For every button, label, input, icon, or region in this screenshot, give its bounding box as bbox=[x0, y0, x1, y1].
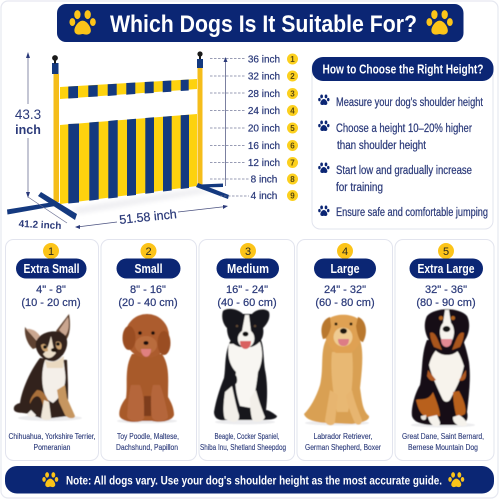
size label bbox=[410, 258, 483, 278]
height range: 16" - 24" bbox=[226, 284, 268, 296]
height labels: 24 inch bbox=[248, 106, 280, 117]
height range: 32" - 36" bbox=[425, 284, 467, 296]
icon: paw left bbox=[42, 472, 58, 487]
size label: Large bbox=[330, 261, 360, 276]
dog: golden retriever bbox=[304, 315, 369, 426]
number badge: 5 bbox=[443, 246, 449, 258]
height range bbox=[217, 284, 277, 309]
width dimension 51.58 inch: 51.58 inch bbox=[119, 207, 177, 227]
breed examples bbox=[116, 431, 179, 452]
height range: 24" - 32" bbox=[324, 284, 366, 296]
breed examples bbox=[402, 431, 484, 452]
number badge: 3 bbox=[245, 246, 251, 258]
number badge bbox=[43, 243, 59, 259]
badge numbers: 8 bbox=[290, 175, 295, 184]
height range: (60 - 80 cm) bbox=[315, 297, 375, 309]
icon: paw right bbox=[426, 10, 453, 35]
right foot bbox=[196, 183, 229, 199]
tip 2: Choose a height 10–20% higher bbox=[336, 123, 472, 135]
size label bbox=[116, 258, 180, 278]
badge numbers: 2 bbox=[290, 72, 295, 81]
dog: chihuahua bbox=[14, 314, 82, 421]
left post bbox=[52, 55, 59, 202]
size label: Small bbox=[134, 261, 162, 276]
number badge: 1 bbox=[48, 246, 54, 258]
height labels: 20 inch bbox=[248, 124, 280, 134]
tip 3 bbox=[318, 162, 472, 194]
height range bbox=[118, 284, 178, 309]
panel: large bbox=[297, 240, 392, 460]
badge numbers: 4 bbox=[290, 106, 295, 116]
number badge: 4 bbox=[342, 246, 348, 258]
height range bbox=[315, 284, 375, 309]
height labels bbox=[248, 54, 280, 202]
height labels: 12 inch bbox=[248, 158, 280, 169]
breed examples: Bernese Mountain Dog bbox=[408, 442, 478, 452]
height dimension 43.3 inch: 43.3 bbox=[15, 107, 41, 122]
badge numbers: 7 bbox=[290, 158, 295, 168]
panel: medium bbox=[199, 240, 294, 460]
height range: (20 - 40 cm) bbox=[118, 297, 178, 309]
shadow under hurdle bbox=[70, 188, 212, 214]
depth dimension 41.2 inch bbox=[18, 197, 67, 232]
size label bbox=[216, 258, 279, 278]
panel heading bbox=[312, 57, 494, 81]
size label: Extra Large bbox=[418, 261, 474, 276]
tip 1 bbox=[318, 94, 484, 109]
badge numbers: 5 bbox=[290, 124, 295, 133]
top striped bar bbox=[60, 79, 197, 99]
adjustable height scale bbox=[210, 54, 298, 202]
height labels: 8 inch bbox=[251, 174, 277, 186]
depth dimension 41.2 inch: 41.2 inch bbox=[18, 219, 62, 232]
height range: (80 - 90 cm) bbox=[416, 297, 476, 309]
height labels: 36 inch bbox=[248, 54, 280, 66]
size label: Extra Small bbox=[24, 261, 80, 276]
breed examples: Dachshund, Papillon bbox=[116, 442, 178, 452]
number badges bbox=[287, 54, 298, 201]
title: Which Dogs Is It Suitable For? bbox=[110, 11, 417, 38]
number badge bbox=[438, 243, 454, 259]
height range: 4" - 8" bbox=[36, 284, 66, 296]
number badge bbox=[337, 243, 353, 259]
breed examples: Labrador Retriever, bbox=[314, 431, 372, 441]
height labels: 16 inch bbox=[248, 141, 280, 152]
note banner bbox=[5, 466, 494, 494]
lower striped panel bbox=[60, 114, 197, 204]
breed examples: Toy Poodle, Maltese, bbox=[117, 431, 179, 441]
dashed leader lines bbox=[210, 58, 249, 196]
panel: how to choose the right height bbox=[312, 57, 494, 229]
breed examples bbox=[8, 431, 96, 452]
size label bbox=[314, 258, 376, 278]
breed examples: German Shepherd, Boxer bbox=[305, 442, 381, 452]
height range bbox=[416, 284, 476, 309]
tip 2 bbox=[318, 120, 472, 152]
number badge bbox=[240, 243, 256, 259]
breed examples: Chihuahua, Yorkshire Terrier, bbox=[8, 431, 96, 441]
size label bbox=[16, 258, 86, 278]
dog: toy poodle bbox=[117, 314, 177, 424]
panel: extra small bbox=[6, 240, 98, 460]
height range bbox=[21, 284, 81, 309]
badge numbers: 3 bbox=[290, 90, 295, 98]
tip 2: than shoulder height bbox=[337, 140, 427, 152]
height range: (10 - 20 cm) bbox=[21, 297, 81, 309]
height dimension 43.3 inch: inch bbox=[15, 123, 41, 137]
tip 3: for training bbox=[336, 182, 383, 194]
badge numbers bbox=[290, 55, 295, 200]
left foot bbox=[7, 192, 77, 220]
number badge bbox=[140, 243, 156, 259]
dog: bernese mountain dog bbox=[411, 309, 475, 428]
panel: extra large bbox=[395, 240, 494, 460]
badge numbers: 9 bbox=[290, 192, 295, 200]
height range: 8" - 16" bbox=[130, 284, 166, 296]
title banner bbox=[57, 4, 464, 42]
number badge: 2 bbox=[145, 246, 152, 258]
size label: Medium bbox=[227, 261, 269, 276]
icon: paw left bbox=[69, 10, 96, 35]
breed examples: Pomeranian bbox=[34, 442, 71, 452]
width dimension 51.58 inch bbox=[75, 205, 228, 229]
breed examples bbox=[200, 431, 286, 452]
height labels: 4 inch bbox=[251, 191, 277, 202]
vertical arrow bbox=[224, 57, 228, 186]
breed examples bbox=[305, 431, 381, 452]
height labels: 32 inch bbox=[248, 72, 280, 82]
breed examples: Beagle, Cocker Spaniel, bbox=[214, 431, 280, 441]
badge numbers: 1 bbox=[290, 55, 295, 64]
panel: small bbox=[101, 240, 196, 460]
badge numbers: 6 bbox=[290, 142, 295, 150]
icon: paw right bbox=[448, 472, 464, 487]
breed examples: Shiba Inu, Shetland Sheepdog bbox=[200, 442, 286, 452]
right post bbox=[197, 51, 203, 185]
dog: border collie bbox=[214, 309, 277, 424]
jump hurdle illustration bbox=[7, 51, 229, 220]
tip 3: Start low and gradually increase bbox=[336, 165, 472, 177]
height labels: 28 inch bbox=[248, 89, 280, 100]
height dimension 43.3 inch bbox=[15, 52, 41, 198]
height range: (40 - 60 cm) bbox=[217, 297, 277, 309]
